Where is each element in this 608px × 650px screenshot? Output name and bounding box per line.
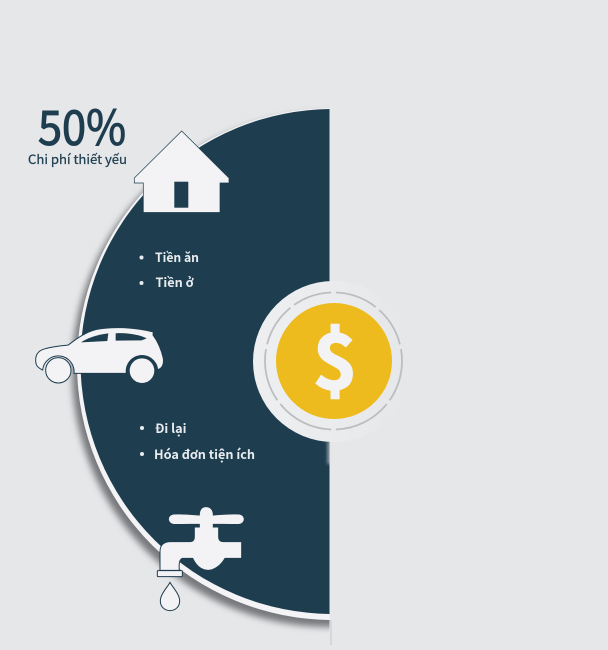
heading: 50%: 50% [38, 89, 126, 159]
icon: house [134, 131, 229, 212]
icon: dollar coin [253, 281, 414, 442]
icon: car [36, 328, 163, 383]
list: housing items: Tiền ăn [155, 247, 199, 266]
list: housing items: Tiền ở [156, 272, 194, 291]
soft glow below coin [328, 440, 330, 464]
icon: dollar coin: $ [313, 301, 357, 411]
list: transport and utilities items [140, 418, 255, 463]
faint vertical line [330, 620, 332, 645]
list: transport and utilities items: Hóa đơn tiện ích [154, 444, 255, 463]
subheading: Chi phí thiết yếu: Chi phí thiết yếu [28, 149, 127, 168]
icon: water tap [157, 507, 244, 611]
list: housing items [140, 247, 199, 291]
list: transport and utilities items: Đi lại [155, 418, 187, 437]
panel: dark half circle [68, 108, 330, 632]
